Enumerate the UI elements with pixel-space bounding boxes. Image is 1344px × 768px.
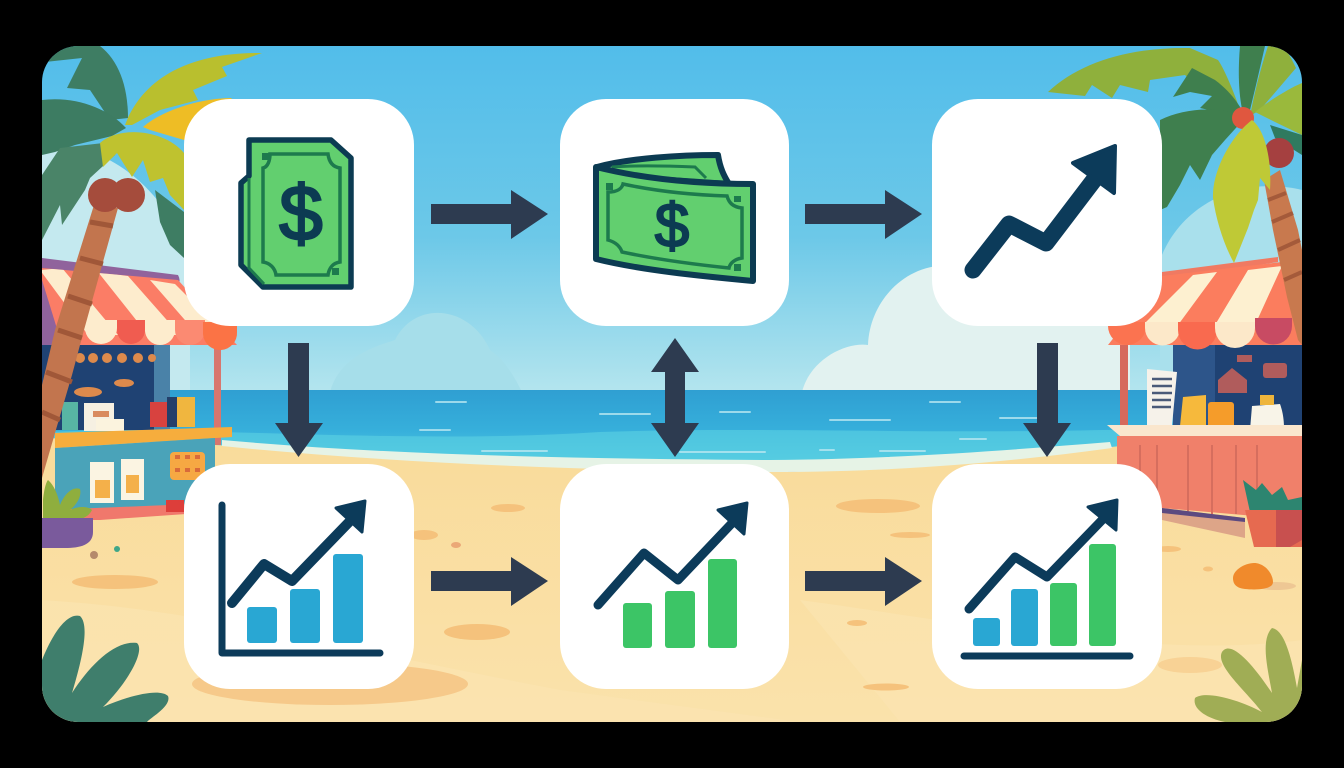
stall back	[1215, 344, 1302, 425]
stall back	[42, 340, 154, 430]
merchandise	[62, 402, 78, 430]
card: folded banknote	[560, 99, 789, 326]
icon: folded banknote with dollar sign	[596, 155, 753, 281]
chart: green bars	[623, 559, 737, 648]
card: trend arrow	[932, 99, 1162, 326]
chart axes	[222, 505, 380, 653]
arrow: top middle to top right	[805, 190, 922, 239]
arrow: bottom left to bottom middle	[431, 557, 548, 606]
counter	[55, 427, 232, 448]
card: blue and green bar chart	[932, 464, 1162, 689]
coconuts	[1264, 138, 1294, 168]
product boxes	[1180, 395, 1206, 426]
chart: blue bars	[247, 554, 363, 643]
arrow: top left down to bottom left	[275, 343, 323, 457]
card: blue bar chart with axes	[184, 464, 414, 689]
right market stall	[1107, 335, 1302, 547]
icon: rising trend arrow	[973, 146, 1115, 270]
icon: trend arrow	[232, 501, 365, 603]
menu board	[1147, 369, 1177, 426]
icon: trend arrow	[969, 500, 1117, 609]
orange shell	[1233, 563, 1296, 590]
arrow: top left to top middle	[431, 190, 548, 239]
coconuts	[88, 178, 116, 212]
sea	[54, 390, 1173, 460]
fronds	[45, 46, 128, 120]
fronds	[1048, 48, 1238, 104]
sand	[42, 428, 1302, 722]
chart baseline	[964, 652, 1130, 660]
arrow: bottom middle to bottom right	[805, 557, 922, 606]
arrow: top right down to bottom right	[1023, 343, 1071, 457]
card: green bar chart	[560, 464, 789, 689]
icon: folded banknote with dollar sign: $	[655, 192, 689, 261]
hanging goods	[1218, 368, 1247, 393]
stall post	[214, 340, 221, 445]
counter	[1107, 425, 1302, 437]
trunk	[42, 205, 118, 478]
right palm tree	[1048, 46, 1302, 345]
clouds	[42, 147, 1302, 392]
stall post	[1120, 340, 1128, 428]
bottom left plant	[42, 616, 168, 722]
bottom right plant	[1195, 628, 1302, 722]
plant pot	[1243, 480, 1302, 512]
card: single banknote	[184, 99, 414, 326]
left palm tree	[42, 46, 262, 478]
trunk	[1264, 170, 1302, 345]
icon: banknote with dollar sign	[241, 140, 351, 287]
arrow: two-way between top middle and bottom middle	[651, 338, 699, 457]
chart: mixed bars	[973, 544, 1116, 646]
sky	[42, 46, 1302, 392]
left market stall	[42, 340, 232, 548]
icon: trend arrow	[598, 503, 747, 605]
right awning	[1108, 257, 1308, 350]
left awning	[40, 258, 242, 350]
plant pot	[43, 480, 92, 520]
icon: banknote with dollar sign: $	[279, 169, 323, 257]
